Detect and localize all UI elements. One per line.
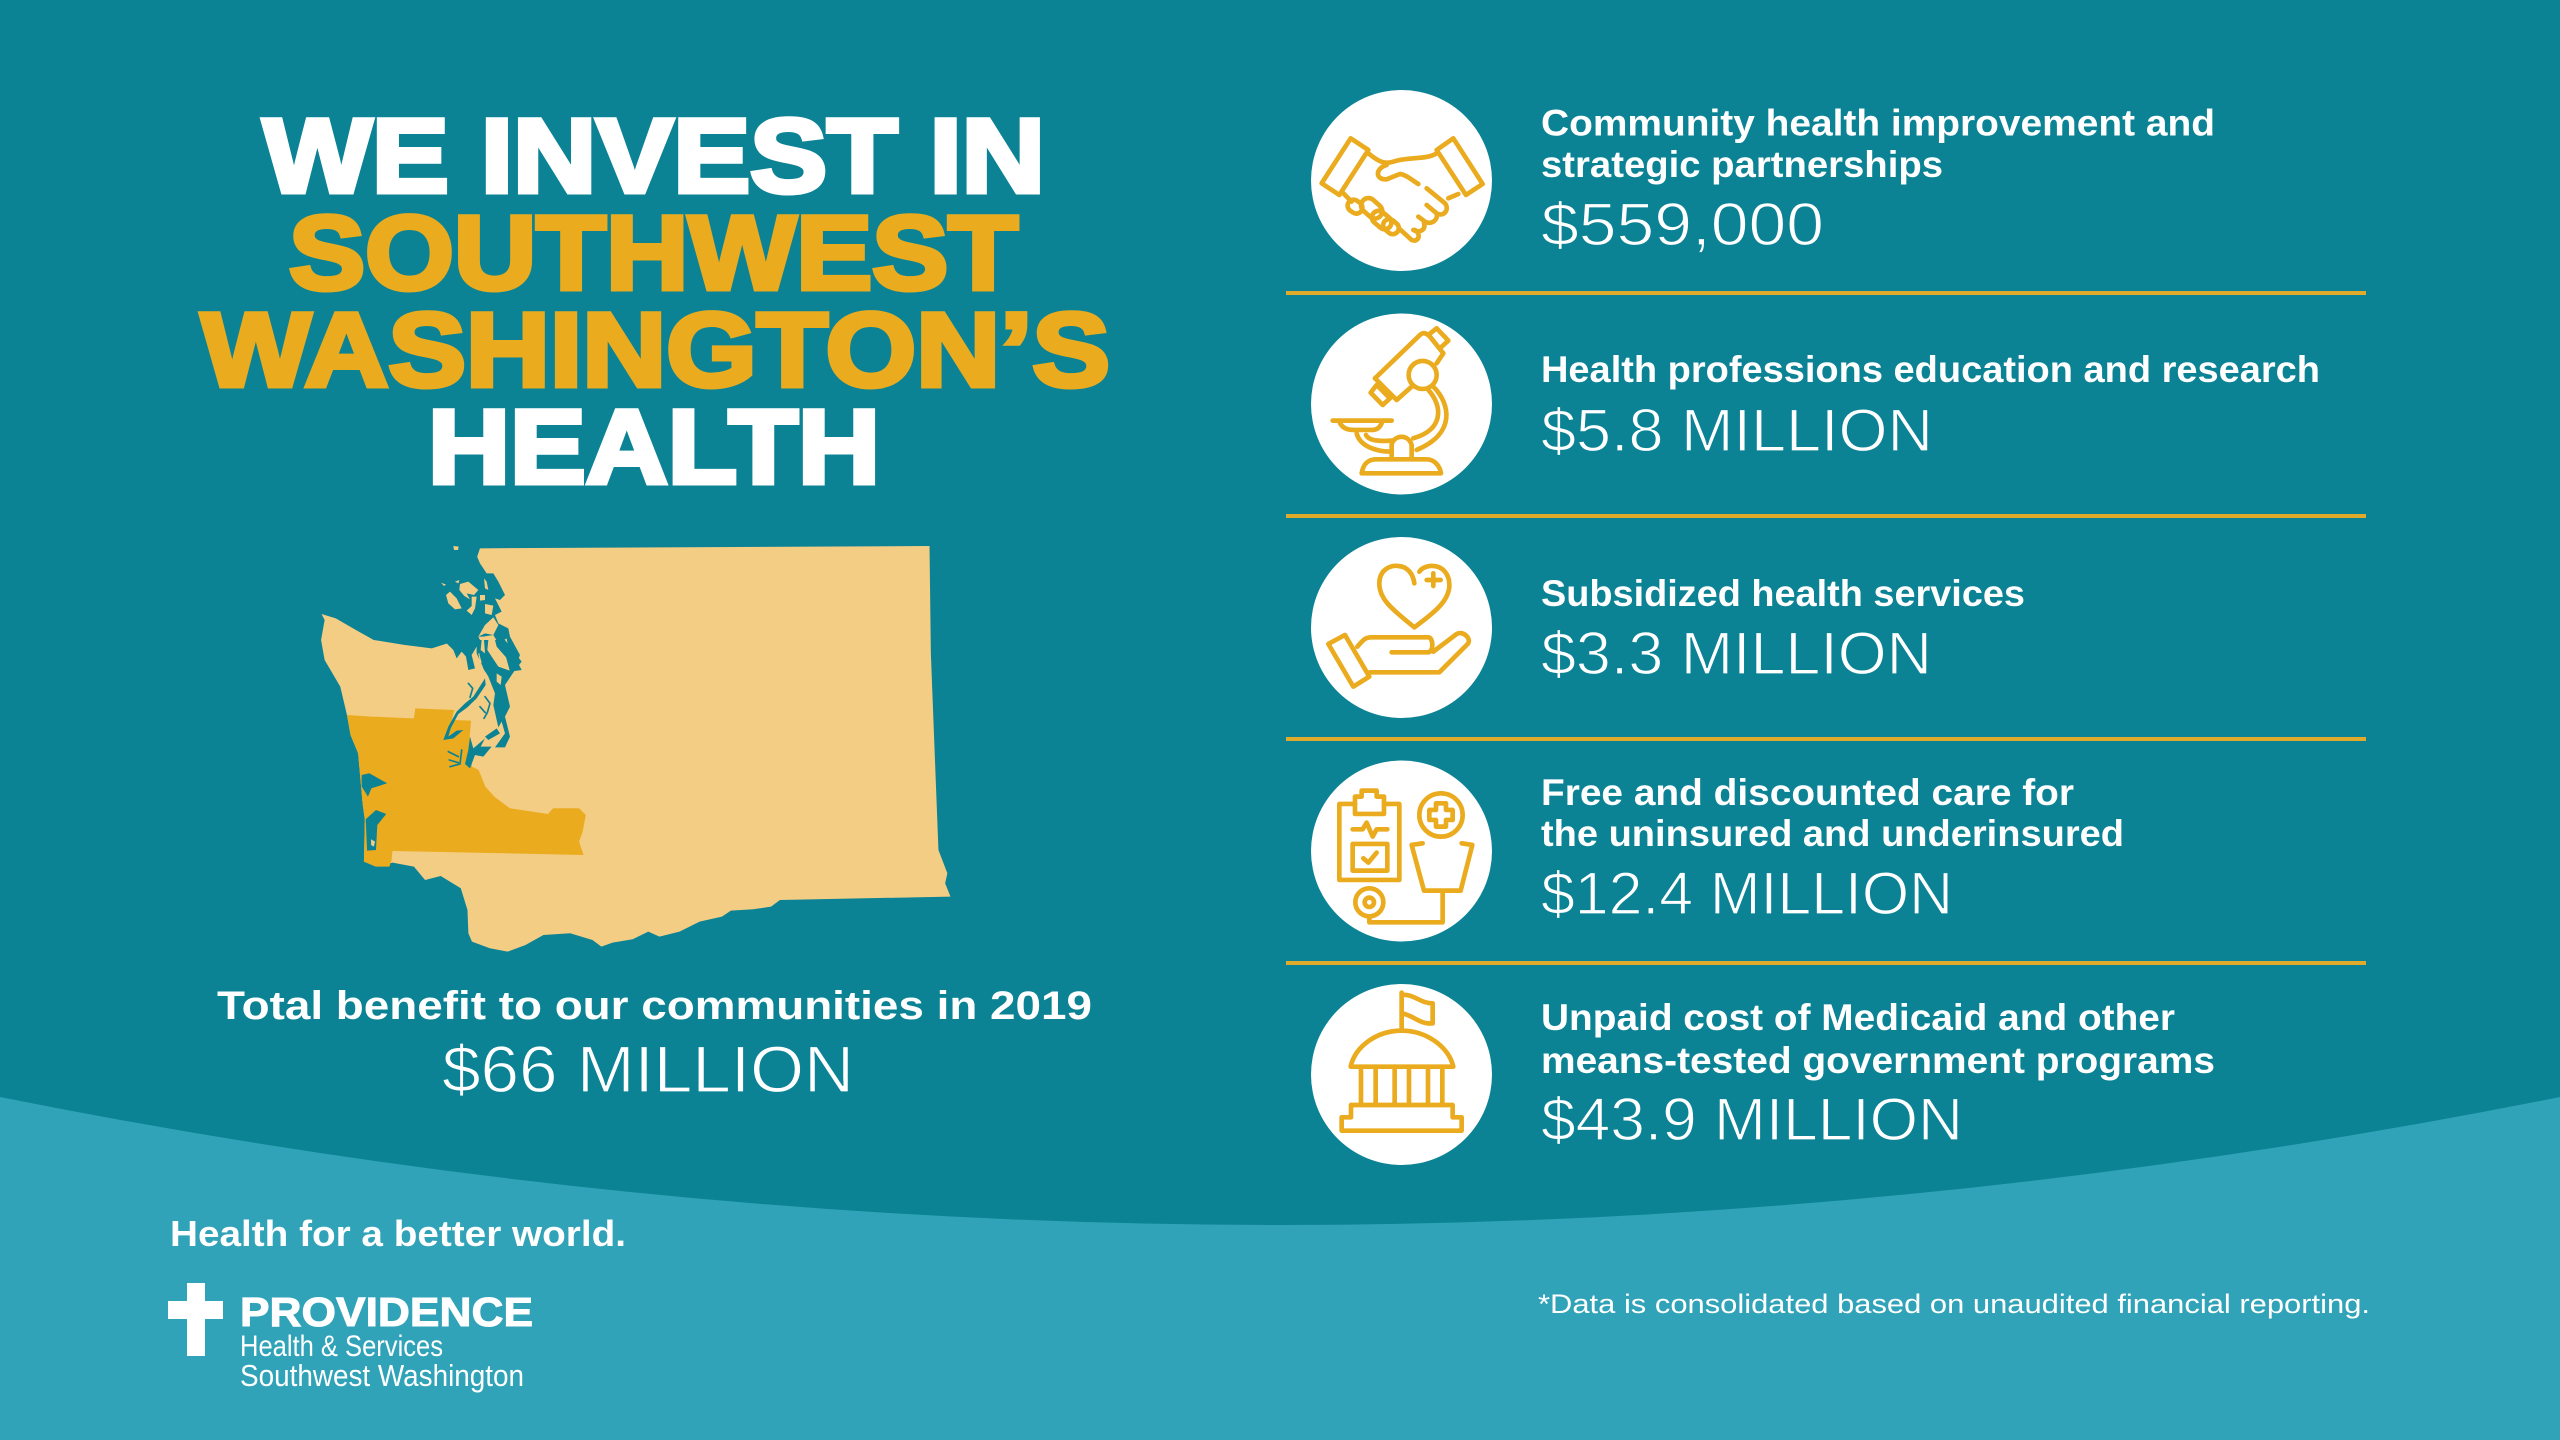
icon: clipboard and stethoscope xyxy=(1339,791,1472,922)
Grays Harbor and Willapa Bay xyxy=(362,773,387,851)
tagline: Health for a better world. xyxy=(170,1213,626,1254)
panel: subsidized health services xyxy=(1311,537,2025,718)
panel: unpaid cost of Medicaid xyxy=(1311,984,2215,1165)
panel: health professions education: $5.8 MILLION xyxy=(1541,397,1933,464)
icon: cross xyxy=(168,1283,223,1356)
southern Puget Sound and Hood Canal xyxy=(443,640,522,768)
total benefit xyxy=(217,984,1092,1106)
title: WE INVEST IN xyxy=(263,98,1045,215)
title xyxy=(201,98,1110,506)
footer wave band xyxy=(0,1097,2560,1440)
footnote: *Data is consolidated based on unaudited financial reporting. xyxy=(1538,1289,2370,1319)
panel: community health improvement: strategic partnerships xyxy=(1541,144,1943,185)
panel: unpaid cost of Medicaid: $43.9 MILLION xyxy=(1541,1086,1963,1153)
title: WASHINGTON’S xyxy=(201,292,1110,409)
title: SOUTHWEST xyxy=(289,195,1018,312)
highlighted southwest region xyxy=(347,708,586,867)
panel: community health improvement: Community health improvement and xyxy=(1541,102,2215,144)
panel: health professions education: Health professions education and research xyxy=(1541,349,2320,390)
icon: microscope xyxy=(1333,328,1448,473)
panel: free and discounted care xyxy=(1311,760,2124,942)
panel: unpaid cost of Medicaid: means-tested government programs xyxy=(1541,1040,2215,1081)
panel: community health improvement: $559,000 xyxy=(1541,191,1824,258)
title: HEALTH xyxy=(428,389,880,506)
panel: health professions education xyxy=(1311,314,2320,494)
map of Washington state xyxy=(321,540,950,952)
logo: Providence xyxy=(168,1283,533,1393)
state outline xyxy=(321,546,950,952)
northern Puget Sound and San Juan islands xyxy=(441,540,522,672)
total benefit: $66 MILLION xyxy=(442,1032,854,1106)
icon: handshake xyxy=(1322,138,1483,241)
panel: free and discounted care: Free and discounted care for xyxy=(1541,772,2074,813)
icon: capitol building xyxy=(1342,993,1462,1131)
logo: Providence: PROVIDENCE xyxy=(240,1289,533,1335)
panel: community health improvement xyxy=(1311,90,2215,271)
panel: subsidized health services: $3.3 MILLION xyxy=(1541,620,1932,687)
panel: free and discounted care: $12.4 MILLION xyxy=(1541,860,1953,927)
panel: subsidized health services: Subsidized health services xyxy=(1541,573,2025,614)
panel: free and discounted care: the uninsured and underinsured xyxy=(1541,813,2124,854)
logo: Providence: Southwest Washington xyxy=(240,1358,524,1393)
total benefit: Total benefit to our communities in 2019 xyxy=(217,984,1092,1028)
icon: hand holding heart xyxy=(1328,566,1469,687)
logo: Providence: Health & Services xyxy=(240,1330,443,1363)
panel: unpaid cost of Medicaid: Unpaid cost of Medicaid and other xyxy=(1541,997,2175,1038)
